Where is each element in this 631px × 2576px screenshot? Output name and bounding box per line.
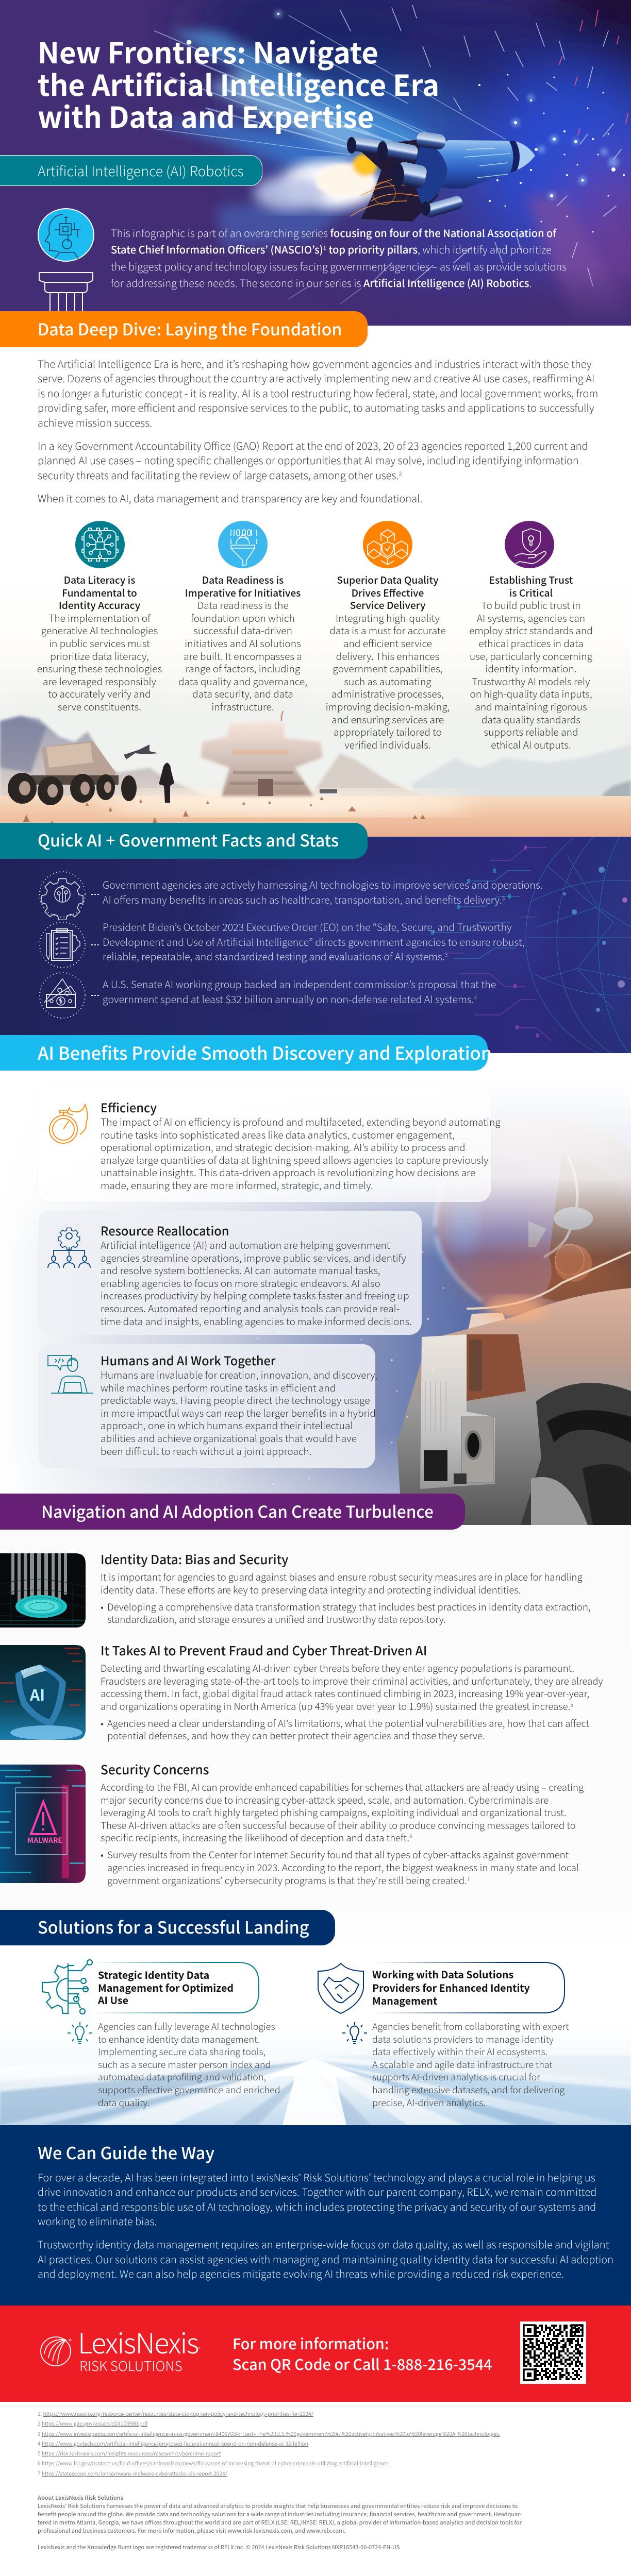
outline: strategic xyxy=(93,1962,259,2013)
fact icon: clipboard xyxy=(39,922,99,968)
heading: strategic identity: Management for Optimized xyxy=(98,1980,234,1995)
text: data literacy: The implementation of xyxy=(48,611,151,625)
text: working body: data effectively within their AI ecosystems. xyxy=(372,2045,547,2058)
text: prevent fraud: and organizations operating in North America (up 43% year over year to 1.9%) sustained the greatest increase.5 xyxy=(101,1699,573,1713)
card: resource reallocation xyxy=(38,1211,422,1335)
white arrow xyxy=(268,2058,361,2125)
card: humans and ai xyxy=(38,1344,375,1468)
text: resource reallocation: increases productivity by helping complete tasks faster and freeing up xyxy=(101,1288,409,1302)
text: prevent fraud: • xyxy=(101,1716,104,1730)
text: strategic body: automated data profiling and validation, xyxy=(98,2070,266,2083)
text: data literacy: in public services must xyxy=(49,636,150,650)
text: establishing trust: data quality standards xyxy=(481,712,580,726)
image: malware warning: MALWARE xyxy=(27,1835,62,1845)
text: establishing trust: To build public trust in xyxy=(481,598,581,612)
text: efficiency: operational optimization, and strategic decision-making. AI’s ability to process and xyxy=(101,1140,466,1154)
text: strategic body: data quality. xyxy=(98,2096,150,2109)
text: security concerns xyxy=(101,1761,584,1887)
fact text 3: government spend at least $32 billion annually on non-defense related AI systems.4 xyxy=(103,991,477,1006)
text: security concerns: Security Concerns xyxy=(101,1760,209,1778)
section heading: turbulence xyxy=(0,1494,465,1530)
top white fade xyxy=(0,1082,631,1257)
references list xyxy=(38,2409,500,2479)
references list: 5 https://risk.lexisnexis.com/insights-resources/research/cybercrime-report xyxy=(38,2450,221,2458)
text: establishing trust: Trustworthy AI models rely xyxy=(472,674,590,688)
fact text 2 xyxy=(103,919,525,963)
section heading: ai benefits xyxy=(0,1035,488,1071)
panel: contact band xyxy=(0,2306,631,2402)
intro paragraphs: security threats and facilitating the review of large datasets, among other uses.2 When it comes to AI, data management and transparency are key and foundational. xyxy=(38,467,422,505)
icon: data cubes with shield xyxy=(363,521,412,568)
fact text 2: reliable, repeatable, and standardized testing and evaluations of AI systems.3 xyxy=(103,948,447,963)
text: resource reallocation: enabling agencies to focus on more strategic endeavors. AI also xyxy=(101,1276,380,1290)
text: strategic body: to enhance identity data management. xyxy=(98,2032,260,2046)
text: data readiness: range of factors, including xyxy=(186,661,300,675)
text: data literacy: Data Literacy is xyxy=(64,572,135,587)
intro text block: for addressing these needs. The second in our series is Artificial Intelligence (AI) Robotics. xyxy=(111,275,532,290)
text: data readiness: Imperative for Initiatives xyxy=(185,585,301,600)
text: data literacy: Identity Accuracy xyxy=(59,598,140,612)
text: strategic body: supports effective governance and enriched xyxy=(98,2083,280,2096)
intro paragraphs: The Artificial Intelligence Era is here, and it’s reshaping how government agencies and industries interact with those they xyxy=(38,356,592,371)
main title: the Artificial Intelligence Era xyxy=(38,63,439,104)
about text: About LexisNexis Risk Solutions xyxy=(38,2494,123,2502)
text: working body: handling extensive datasets, and for delivering xyxy=(372,2083,564,2096)
text: establishing trust: ethical practices in data xyxy=(478,636,584,650)
logo: knowledge burst xyxy=(39,2335,73,2367)
fact text 1: AI offers many benefits in areas such as healthcare, transportation, and benefits delivery.3 xyxy=(103,891,505,907)
image: fingerprint and data xyxy=(0,1553,86,1628)
section heading: quick facts xyxy=(0,823,368,859)
icon: gear circuit xyxy=(42,1960,92,2014)
text: resource reallocation: Artificial intelligence (AI) and automation are helping government xyxy=(101,1238,390,1252)
text: humans and ai: abilities and achieve organizational goals that would have xyxy=(101,1431,357,1445)
text: strategic body xyxy=(98,2020,280,2109)
main title: New Frontiers: Navigate xyxy=(38,30,378,72)
lower fade xyxy=(0,268,631,326)
about text: LexisNexis® Risk Solutions harnesses the power of data and advanced analytics to provide insights that help businesses and governmental entities reduce risk and improve decisions to xyxy=(38,2502,518,2510)
text: data quality: Integrating high-quality xyxy=(336,611,440,625)
text: guide the way: to the ethical and responsible use of AI technology, which includes protecting the privacy and security of our systems and xyxy=(38,2199,596,2214)
text: humans and ai: approach, one in which humans expand their intellectual xyxy=(101,1418,353,1432)
fact text 3 xyxy=(103,976,496,1006)
text: data literacy: are leveraged responsibly xyxy=(43,674,156,688)
references list: 1. https://www.nascio.org/resource-center/resources/state-cio-top-ten-policy-and-technology-priorities-for-2024/ xyxy=(38,2410,313,2418)
text: identity data xyxy=(101,1551,591,1626)
fact text 1: Government agencies are actively harnessing AI technologies to improve services and operations. xyxy=(103,877,543,892)
text: establishing trust: is Critical xyxy=(509,585,553,600)
text: establishing trust: employ strict standards and xyxy=(469,623,593,637)
text: guide the way: AI practices. Our solutions can assist agencies with managing and maintaining quality identity data for successful AI adoption xyxy=(38,2251,613,2266)
head and ear xyxy=(541,1154,631,1314)
text: data literacy: serve constituents. xyxy=(58,699,141,714)
icon: AI head and pillar xyxy=(39,214,93,311)
references list: 4 https://www.govtech.com/artificial-intelligence/proposed-federal-annual-spend-on-non-defense-ai-32-billion xyxy=(38,2440,308,2448)
heading: strategic identity: Strategic Identity Data xyxy=(98,1967,209,1982)
text: humans and ai: Humans and AI Work Together xyxy=(101,1351,276,1369)
about text: tered in metro Atlanta, Georgia, we have offices throughout the world and are part of RELX (LSE: REL/NYSE: RELX), a global provider of information-based analytics and decision tools for xyxy=(38,2518,522,2527)
section heading: turbulence: Navigation and AI Adoption Can Create Turbulence xyxy=(41,1499,434,1523)
text: humans and ai: predictable ways. Having people direct the technology usage xyxy=(101,1393,370,1407)
text: working body: precise, AI-driven analytics. xyxy=(372,2096,486,2109)
text: establishing trust: AI systems, agencies can xyxy=(477,611,585,625)
text: security concerns: leveraging AI tools to craft highly targeted phishing campaigns, exploiting individual and organizational trust. xyxy=(101,1805,567,1819)
section heading: ai benefits: AI Benefits Provide Smooth Discovery and Exploration xyxy=(38,1039,492,1065)
icon: bulb right xyxy=(342,2022,367,2043)
text: data quality: such as automating xyxy=(344,674,431,688)
landing streaks background xyxy=(0,1945,631,2125)
intro text block: This infographic is part of an overarching series focusing on four of the National Association of xyxy=(111,225,556,240)
neck ring xyxy=(467,1252,631,1309)
text: data literacy: ensuring these technologies xyxy=(37,661,162,675)
text: data literacy: prioritize data literacy, xyxy=(50,649,149,663)
text: data readiness: infrastructure. xyxy=(211,699,274,714)
heading: working with providers: Providers for Enhanced Identity xyxy=(372,1980,530,1995)
image: AI shield: AI xyxy=(29,1683,45,1705)
trademark line: LexisNexis and the Knowledge Burst logo are registered trademarks of RELX Inc. © 2024 LexisNexis Risk Solutions NXR16543-00-0724-EN-US xyxy=(38,2543,400,2551)
text: identity data: Developing a comprehensive data transformation strategy that includes best practices in identity data extraction, xyxy=(107,1600,591,1614)
rover xyxy=(8,741,137,805)
section heading: solutions: Solutions for a Successful Landing xyxy=(38,1914,309,1939)
text: data readiness: are built. It encompasses a xyxy=(184,649,302,663)
helmet xyxy=(435,1115,631,1321)
text: humans and ai xyxy=(101,1352,377,1457)
rocket engine block xyxy=(356,139,438,222)
fact text 1 xyxy=(103,877,543,907)
icon: handshake shield xyxy=(318,1963,363,2013)
text: strategic body: Implementing secure data sharing tools, xyxy=(98,2045,265,2058)
icon: gear and people xyxy=(47,1227,91,1268)
about text xyxy=(38,2494,522,2535)
intro paragraphs: planned AI use cases – noting specific challenges or opportunities that AI may solve, including identifying information xyxy=(38,452,579,467)
icon: bulb left xyxy=(68,2022,92,2043)
text: identity data: identity data. These efforts are key to preserving data integrity and protecting individual identities. xyxy=(101,1583,521,1597)
heading: strategic identity: AI Use xyxy=(98,1992,128,2007)
text: efficiency: unattainable insights. This data-driven approach is revolutionizing how decisions are xyxy=(101,1165,475,1179)
text: data quality: government capabilities, xyxy=(333,661,443,675)
text: guide the way xyxy=(38,2170,613,2281)
text: data quality: delivery. This enhances xyxy=(336,649,439,663)
text: prevent fraud: Detecting and thwarting escalating AI-driven cyber threats before they enter agency populations is paramount. xyxy=(101,1661,574,1675)
text: data readiness xyxy=(178,572,307,714)
intro text block xyxy=(111,225,567,290)
intro paragraphs: serve. Dozens of agencies throughout the country are actively implementing new and creative AI use cases, reaffirming AI xyxy=(38,370,594,385)
about text: professional and business customers. For more information, please visit www.risk.lexisnexis.com, and www.relx.com. xyxy=(38,2527,345,2535)
text: identity data: Identity Data: Bias and Security xyxy=(101,1550,288,1568)
hero background illustration: rocket in space xyxy=(0,0,631,326)
chest pack xyxy=(420,1334,495,1489)
text: humans and ai: Humans are invaluable for creation, innovation, and discovery, xyxy=(101,1367,377,1382)
text: prevent fraud xyxy=(101,1642,603,1742)
text: identity data: standardization, and storage ensures a unified and trustworthy data repository. xyxy=(107,1612,446,1626)
text: security concerns: government organizations’ cybersecurity programs is that they’re still being created.7 xyxy=(107,1873,470,1887)
text: data literacy xyxy=(37,572,162,714)
intro paragraphs xyxy=(38,356,598,505)
text: prevent fraud: Fraudsters are leveraging state-of-the-art tools to improve their criminal activities, and unfortunately, they are already xyxy=(101,1674,603,1688)
image: malware warning xyxy=(0,1765,86,1883)
text: data readiness: data quality and governance, xyxy=(178,674,307,688)
heading: working with providers: Working with Data Solutions xyxy=(372,1967,513,1981)
text: establishing trust xyxy=(469,572,593,752)
solution icons and outlines xyxy=(0,1958,631,2045)
fact text 2: President Biden’s October 2023 Executive Order (EO) on the “Safe, Secure, and Trustworthy xyxy=(103,919,512,934)
section heading: solutions xyxy=(0,1910,335,1945)
desert landscape illustration xyxy=(0,665,631,837)
intro text block: the biggest policy and technology issues facing government agencies – as well as provide solutions xyxy=(111,259,567,274)
subtitle pill xyxy=(0,155,262,186)
text: resource reallocation: and resolve system bottlenecks. AI can automate manual tasks, xyxy=(101,1263,380,1277)
fact text 3: A U.S. Senate AI working group backed an independent commission’s proposal that the xyxy=(103,976,496,991)
walker xyxy=(159,762,174,803)
main title: with Data and Expertise xyxy=(38,95,374,137)
heading: strategic identity xyxy=(98,1969,234,2007)
text: guide the way: working to eliminate bias. Trustworthy identity data management requires an enterprise-wide focus on data quality, as well as responsible and vigilant xyxy=(38,2213,609,2251)
text: data readiness: data security, and data xyxy=(192,686,293,701)
outline: working xyxy=(374,1962,564,2013)
subtitle text: Artificial Intelligence (AI) Robotics xyxy=(38,160,244,180)
text: security concerns: Survey results from the Center for Internet Security found that all types of cyber-attacks against government xyxy=(107,1848,569,1861)
text: establishing trust: Establishing Trust xyxy=(489,572,573,587)
text: prevent fraud: potential defenses, and how they can better protect their agencies and those they serve. xyxy=(107,1728,485,1742)
text: data readiness: Data Readiness is xyxy=(202,572,284,587)
text: resource reallocation: Resource Reallocation xyxy=(101,1222,229,1239)
text: security concerns: According to the FBI, AI can provide enhanced capabilities for schemes that attackers are already using – creating xyxy=(101,1780,584,1794)
text: efficiency: The impact of AI on efficiency is profound and multifaceted, extending beyond automating xyxy=(101,1114,501,1129)
text: efficiency: made, ensuring they are more informed, strategic, and timely. xyxy=(101,1178,373,1192)
text: strategic body: Agencies can fully leverage AI technologies xyxy=(98,2020,275,2033)
text: establishing trust: on high-quality data inputs, xyxy=(470,686,592,701)
icon: stopwatch with flame xyxy=(49,1104,88,1144)
text: humans and ai: been difficult to reach without a joint approach. xyxy=(101,1444,311,1458)
section heading: quick facts: Quick AI + Government Facts and Stats xyxy=(38,828,339,852)
text: efficiency xyxy=(101,1098,501,1192)
text: data quality: Drives Effective xyxy=(352,585,424,600)
text: identity data: • xyxy=(101,1600,104,1614)
text: establishing trust: identity information. xyxy=(485,661,577,675)
main title xyxy=(38,30,439,137)
text: working body: supports AI-driven analytics is crucial for xyxy=(372,2070,540,2083)
text: identity data: It is important for agencies to guard against biases and ensure robust security measures are in place for handling xyxy=(101,1570,583,1584)
text: humans and ai: while machines perform routine tasks in efficient and xyxy=(101,1380,336,1395)
icon: data funnel xyxy=(218,521,268,568)
text: security concerns: specific recipients, increasing the likelihood of deception and data theft.6 xyxy=(101,1831,412,1844)
call to action: For more information: xyxy=(233,2333,389,2354)
rocket engine smoke xyxy=(254,161,381,211)
text: guide the way: and deployment. We can also help agencies mitigate evolving AI threats while providing a reduced risk experience. xyxy=(38,2266,564,2281)
text: data readiness: initiatives and AI solutions xyxy=(185,636,301,650)
text: establishing trust: ethical AI outputs. xyxy=(491,737,571,752)
text: data quality xyxy=(326,572,450,752)
text: humans and ai: in more impactful ways can reap the larger benefits in a hybrid xyxy=(101,1405,376,1420)
text: data literacy: Fundamental to xyxy=(62,585,137,600)
text: prevent fraud: accessing them. In fact, global digital fraud attack rates continued climbing in 2023, increasing 19% year-over-year, xyxy=(101,1686,589,1700)
text: data literacy: generative AI technologies xyxy=(41,623,158,637)
text: resource reallocation: time data and insights, enabling agencies to make informed decisions. xyxy=(101,1314,412,1328)
intro paragraphs: is no longer a futuristic concept - it is reality. AI is a tool restructuring how federal, state, and local government works, from xyxy=(38,385,598,400)
section heading: data deep dive xyxy=(0,311,368,347)
text: strategic body: such as a secure master person index and xyxy=(98,2058,271,2071)
turbulence background xyxy=(0,1525,631,2040)
logo: risk solutions: RISK SOLUTIONS xyxy=(79,2356,182,2375)
references list: 6 https://www.fbi.gov/contact-us/field-offices/sanfrancisco/news/fbi-warns-of-increasing-threat-of-cyber-criminals-utilizing-artificial-intelligence xyxy=(38,2460,388,2467)
rocket body xyxy=(430,140,535,189)
references list: 3 https://www.investopedia.com/artificial-intelligence-in-us-government-8406703#:~:text=The%20U.S.%20government%20is%20actively,initiatives%20to%20leverage%20AI%20technologies. xyxy=(38,2430,500,2438)
text: data literacy: to accurately verify and xyxy=(48,686,151,701)
text: security concerns: major security concerns due to increasing cyber-attack speed, scale, and automation. Cybercriminals are xyxy=(101,1793,549,1807)
heading: guide the way: We Can Guide the Way xyxy=(38,2140,214,2164)
text: efficiency: analyze large quantities of data at lightning speed allows agencies to capture previously xyxy=(101,1153,488,1167)
space dust xyxy=(216,1207,444,1495)
fact icon: money xyxy=(39,972,99,1019)
suit body xyxy=(397,1288,631,1525)
text: efficiency: Efficiency xyxy=(101,1098,157,1116)
icon: person at laptop xyxy=(47,1354,94,1395)
icon: chip lock xyxy=(75,521,125,568)
text: resource reallocation xyxy=(101,1222,412,1327)
text: data quality: data is a must for accurate xyxy=(329,623,446,637)
flying ship xyxy=(124,744,159,759)
text: data readiness: Data readiness is the xyxy=(197,598,289,612)
tower xyxy=(201,721,323,796)
icon: cyan circle xyxy=(38,208,94,262)
text: resource reallocation: resources. Automated reporting and analysis tools can provide real- xyxy=(101,1301,400,1315)
text: data quality: administrative processes, xyxy=(331,686,444,701)
intro paragraphs: achieve mission success. In a key Government Accountability Office (GAO) Report at the end of 2023, 20 of 23 agencies reported 1,200 current and xyxy=(38,415,588,453)
heading: working with providers: Management xyxy=(372,1993,437,2008)
text: efficiency: routine tasks into sophisticated areas like data analytics, customer engagement, xyxy=(101,1127,455,1142)
text: establishing trust: and maintaining rigorous xyxy=(475,699,587,714)
call to action: Scan QR Code or Call 1-888-216-3544 xyxy=(233,2353,492,2374)
text: prevent fraud: Agencies need a clear understanding of AI’s limitations, what the potential vulnerabilities are, how that can affect xyxy=(107,1716,589,1730)
logo: lexisnexis wordmark: LexisNexis® xyxy=(78,2321,201,2362)
fact icon: gear xyxy=(39,871,99,920)
text: establishing trust: use, particularly concerning xyxy=(470,649,592,663)
about text: benefit people around the globe. We provide data and technology solutions for a wide range of industries including insurance, financial services, healthcare and government. Headquar- xyxy=(38,2510,522,2518)
text: working body: data solutions providers to manage identity xyxy=(372,2032,554,2046)
references list: 7 https://statescoop.com/ransomware-malware-cyberattacks-cis-report-2024/ xyxy=(38,2470,227,2478)
call to action xyxy=(233,2333,492,2374)
card: efficiency xyxy=(38,1084,491,1202)
text: resource reallocation: agencies streamline operations, improve public services, and identify xyxy=(101,1250,406,1265)
QR code xyxy=(520,2321,586,2384)
panel: we can guide the way xyxy=(0,2125,631,2306)
text: data quality: and efficient service xyxy=(343,636,432,650)
text: working body: Agencies benefit from collaborating with expert xyxy=(372,2020,569,2033)
fact text 2: Development and Use of Artificial Intelligence” directs government agencies to ensure robust, xyxy=(103,934,525,949)
text: prevent fraud: It Takes AI to Prevent Fraud and Cyber Threat-Driven AI xyxy=(101,1641,427,1659)
references list: 2 https://www.gao.gov/assets/d24105980.pdf xyxy=(38,2420,147,2428)
text: establishing trust: supports reliable and xyxy=(484,724,578,739)
intro paragraphs: providing safer, more efficient and responsive services to the public, to automating tasks and applications to successfully xyxy=(38,400,594,415)
text: security concerns: These AI-driven attacks are often successful because of their ability to produce convincing messages tailored to xyxy=(101,1818,576,1832)
text: data quality: Service Delivery xyxy=(350,598,425,612)
heading: working with providers xyxy=(372,1968,530,2007)
rocks xyxy=(23,796,425,834)
text: security concerns: • xyxy=(101,1848,104,1861)
text: data quality: improving decision-making, xyxy=(326,699,450,714)
text: security concerns: agencies increased in frequency in 2023. According to the report, the biggest weakness in many state and local xyxy=(107,1860,579,1874)
text: data quality: verified individuals. xyxy=(344,737,431,752)
section heading: data deep dive: Data Deep Dive: Laying the Foundation xyxy=(38,317,342,341)
text: data quality: Superior Data Quality xyxy=(337,572,439,587)
text: working body xyxy=(372,2020,569,2109)
text: data readiness: successful data-driven xyxy=(193,623,292,637)
intro text block: State Chief Information Officers’ (NASCIO’s)1 top priority pillars, which identify and prioritize xyxy=(111,242,552,257)
icon: greek pillar xyxy=(39,273,93,312)
rocket thrusters xyxy=(350,131,464,218)
icon: shield in hand xyxy=(505,521,554,568)
dark globe background xyxy=(0,837,631,1053)
text: data quality: appropriately tailored to xyxy=(334,724,442,739)
image: AI shield xyxy=(0,1645,86,1740)
text: working body: A scalable and agile data infrastructure that xyxy=(372,2058,553,2071)
astronaut background illustration xyxy=(27,1111,631,1525)
text: data readiness: foundation upon which xyxy=(191,611,295,625)
text: guide the way: drive innovation and enhance our products and services. Together with our parent company, RELX, we remain committed xyxy=(38,2184,596,2199)
text: guide the way: For over a decade, AI has been integrated into LexisNexis® Risk Solutions’ technology and plays a crucial role in helping us xyxy=(38,2170,595,2184)
text: data quality: and ensuring services are xyxy=(331,712,444,726)
